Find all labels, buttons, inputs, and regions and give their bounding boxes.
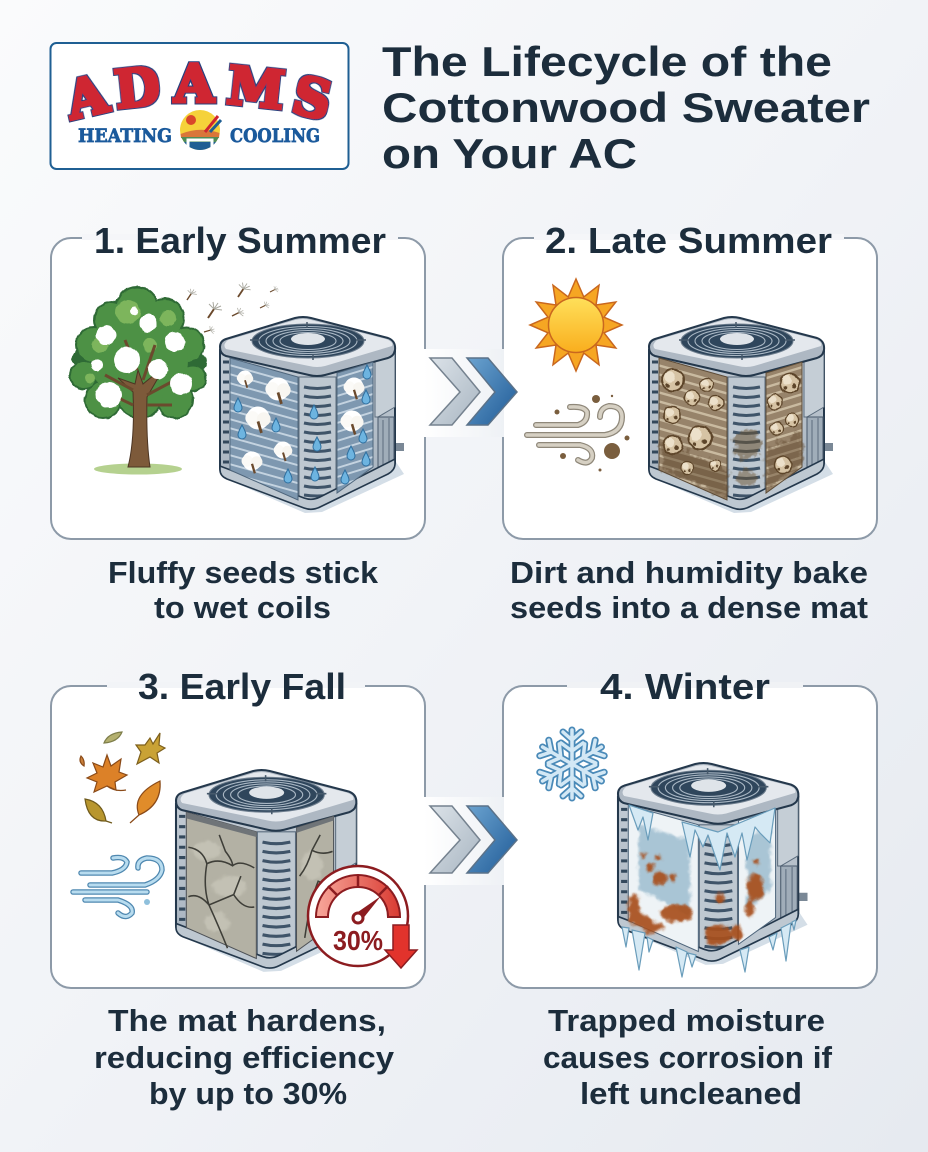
icicles xyxy=(622,805,796,977)
panel: late summer xyxy=(503,220,877,539)
caption: early fall: by up to 30% xyxy=(149,1076,347,1111)
seed clumps xyxy=(237,370,364,473)
water droplets xyxy=(234,365,371,484)
icon: floating seeds xyxy=(187,283,280,337)
cracks xyxy=(188,835,333,948)
title xyxy=(382,38,870,177)
panel: winter xyxy=(503,666,877,988)
arrow: early to late summer xyxy=(424,349,517,437)
caption: early summer xyxy=(108,555,379,625)
heading: early fall: 3. Early Fall xyxy=(138,666,346,707)
caption: late summer: Dirt and humidity bake xyxy=(510,555,868,590)
title: The Lifecycle of the xyxy=(382,38,832,85)
heading: winter: 4. Winter xyxy=(600,666,770,707)
caption: winter: Trapped moisture xyxy=(548,1003,825,1038)
icon: efficiency gauge down 30% xyxy=(308,866,417,968)
arrow: early fall to winter xyxy=(424,797,517,885)
caption: winter: left uncleaned xyxy=(580,1076,802,1111)
icon: dusty wind xyxy=(527,395,630,472)
dirt clumps xyxy=(662,369,800,474)
logo: Adams Heating & Cooling: A xyxy=(60,64,114,132)
caption: early fall: reducing efficiency xyxy=(94,1040,395,1075)
icon: cottonwood tree xyxy=(69,286,207,474)
icon: falling leaves xyxy=(80,732,165,823)
icon: efficiency gauge down 30%: 30% xyxy=(333,925,383,956)
caption: late summer xyxy=(510,555,868,625)
logo: Adams Heating & Cooling: S xyxy=(287,65,337,133)
caption: early summer: to wet coils xyxy=(154,590,331,625)
logo: Adams Heating & Cooling xyxy=(50,43,348,169)
icon: sun xyxy=(530,279,622,371)
heading: early summer: 1. Early Summer xyxy=(94,220,386,261)
caption: winter xyxy=(543,1003,833,1111)
panel: early summer xyxy=(51,220,425,539)
logo: Adams Heating & Cooling: D xyxy=(112,56,163,121)
heading: late summer: 2. Late Summer xyxy=(545,220,832,261)
caption: early fall xyxy=(94,1003,395,1111)
icon: AC with baked dirt mat xyxy=(649,317,833,513)
panel: early fall xyxy=(51,666,877,1111)
title: on Your AC xyxy=(382,130,637,177)
icon: AC with cottonwood on wet coils xyxy=(220,317,404,513)
caption: winter: causes corrosion if xyxy=(543,1040,833,1075)
logo: Adams Heating & Cooling: A xyxy=(173,54,215,115)
icon: frozen corroded AC xyxy=(618,763,808,977)
icon: AC with hardened mat xyxy=(176,770,366,972)
caption: early fall: The mat hardens, xyxy=(108,1003,386,1038)
logo: Adams Heating & Cooling: COOLING xyxy=(230,125,320,147)
rust patches xyxy=(628,852,763,945)
logo: Adams Heating & Cooling: HEATING xyxy=(78,125,172,147)
title: Cottonwood Sweater xyxy=(382,84,870,131)
caption: early summer: Fluffy seeds stick xyxy=(108,555,379,590)
caption: late summer: seeds into a dense mat xyxy=(510,590,868,625)
icon: snowflake xyxy=(537,730,607,798)
icon: blue wind xyxy=(73,858,162,916)
logo: Adams Heating & Cooling: M xyxy=(224,55,288,122)
